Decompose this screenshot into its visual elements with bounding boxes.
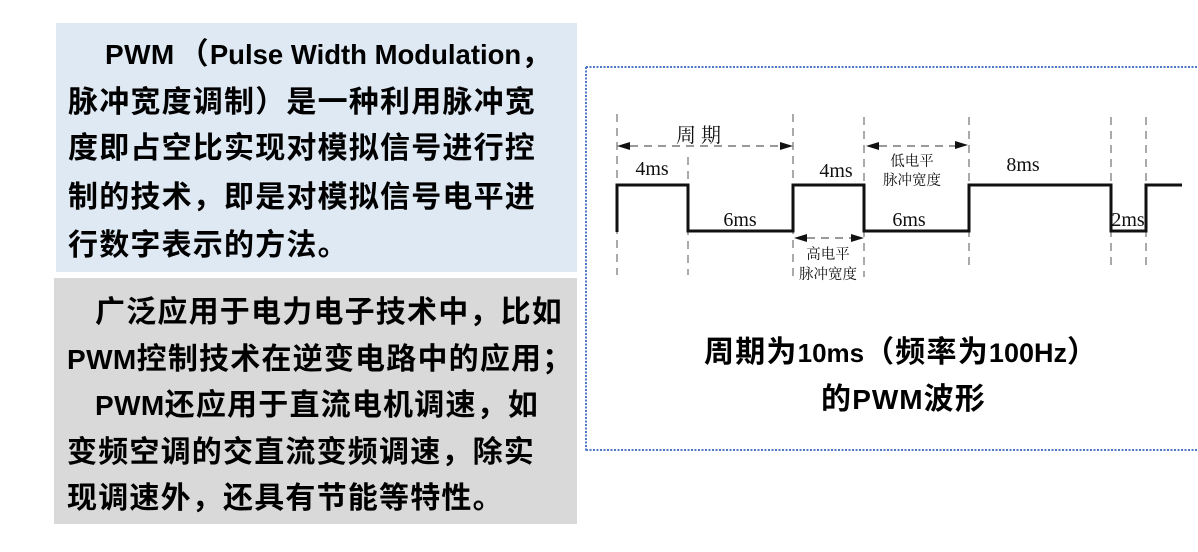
text block: PWM definition: [68, 38, 552, 262]
label: high-level pulse width: 高电平: [806, 245, 850, 263]
label: high-level pulse width: 脉冲宽度: [799, 265, 857, 283]
label: period: 周期: [676, 124, 726, 147]
label: 6ms second: 6ms: [892, 209, 926, 231]
panel: PWM definition: [56, 23, 577, 272]
label: 2ms: 2ms: [1111, 209, 1145, 231]
caption: 的PWM波形: [821, 383, 986, 416]
label: low-level pulse width: [883, 152, 941, 189]
panel: PWM applications: [54, 278, 577, 524]
caption: 周期为10ms（频率为100Hz）: [704, 336, 1098, 369]
label: high-level pulse width: [799, 245, 857, 283]
caption: [704, 336, 1098, 416]
text block: PWM applications: 广泛应用于电力电子技术中，比如: [95, 296, 563, 329]
text block: PWM definition: 行数字表示的方法。: [68, 229, 349, 262]
label: low-level pulse width: 低电平: [890, 152, 934, 170]
label: low-level pulse width: 脉冲宽度: [883, 171, 941, 189]
arrow: period: [617, 142, 793, 150]
label: 4ms first: 4ms: [635, 158, 669, 180]
arrow: high-level pulse width: [794, 234, 864, 242]
arrow: low-level pulse width: [866, 141, 968, 150]
text block: PWM definition: 脉冲宽度调制）是一种利用脉冲宽: [68, 86, 536, 119]
text block: PWM applications: 变频空调的交直流变频调速，除实: [67, 436, 535, 469]
label: 8ms: 8ms: [1006, 154, 1040, 176]
text block: PWM definition: 度即占空比实现对模拟信号进行控: [68, 132, 536, 165]
text block: PWM applications: PWM控制技术在逆变电路中的应用；: [67, 343, 573, 376]
text block: PWM applications: 现调速外，还具有节能等特性。: [67, 482, 504, 515]
text block: PWM definition: 制的技术，即是对模拟信号电平进: [68, 181, 536, 214]
label: 6ms first: 6ms: [723, 209, 757, 231]
text block: PWM definition: PWM（Pulse Width Modulation，: [105, 38, 552, 71]
text block: PWM applications: PWM还应用于直流电机调速，如: [95, 389, 539, 422]
text block: PWM applications: [67, 296, 573, 515]
waveform line: [617, 185, 1182, 232]
label: 4ms second: 4ms: [819, 160, 853, 182]
